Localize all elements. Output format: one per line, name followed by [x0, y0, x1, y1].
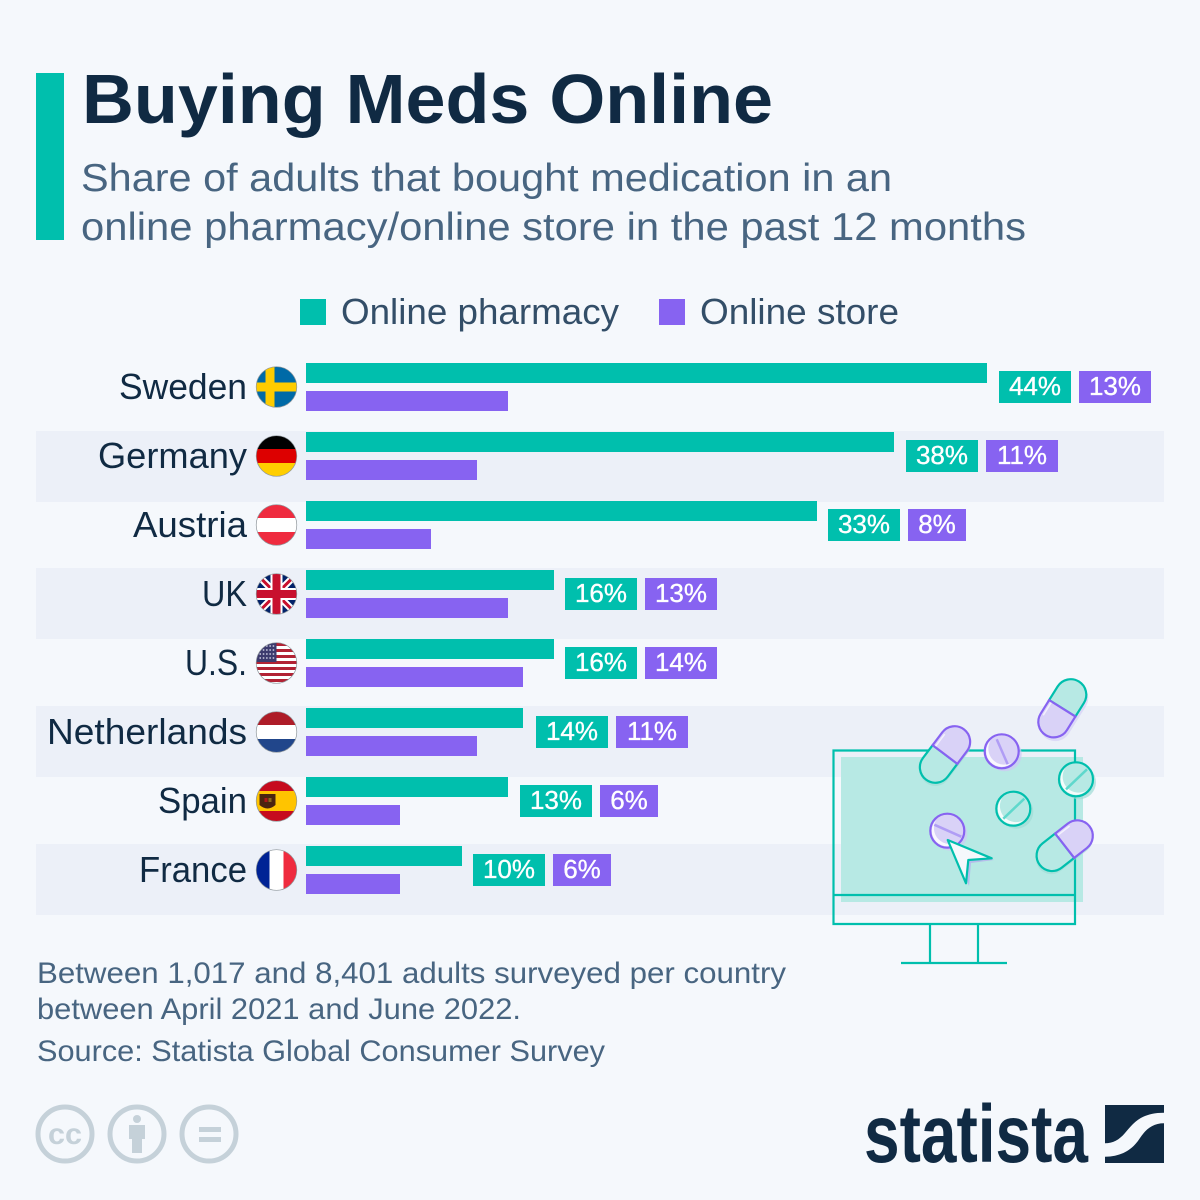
row: France: 10%: [483, 854, 535, 884]
cursor arrow: [948, 840, 994, 886]
row: Spain: 6%: [610, 785, 648, 815]
subtitle: Share of adults that bought medication in an: [81, 157, 892, 200]
row: Sweden: 44%: [1009, 371, 1061, 401]
icon: cc licence: cc: [48, 1118, 82, 1151]
illustration: monitor with pills: [834, 673, 1100, 963]
row: Spain: 13%: [530, 785, 582, 815]
footnote: between April 2021 and June 2022.: [37, 993, 521, 1026]
capsule right: [1028, 814, 1100, 880]
row: France: France: [139, 849, 247, 890]
row: Germany: Germany: [98, 435, 247, 476]
capsule top right: [1031, 673, 1095, 747]
footnote: Between 1,017 and 8,401 adults surveyed per country: [37, 957, 786, 990]
row: U.S.: U.S.: [185, 642, 247, 683]
row: France: [139, 846, 611, 894]
subtitle: [81, 157, 1026, 249]
row: U.S.: [185, 639, 717, 687]
row: Germany: 38%: [916, 440, 968, 470]
row: UK: UK: [202, 573, 247, 614]
row: Spain: Spain: [158, 780, 247, 821]
row: UK: [202, 570, 717, 618]
row: U.S.: 16%: [575, 647, 627, 677]
row: Austria: 33%: [838, 509, 890, 539]
tablet purple top: [985, 734, 1022, 771]
row: Germany: [98, 432, 1058, 480]
row: Netherlands: Netherlands: [47, 711, 247, 752]
tablet teal right: [1059, 762, 1096, 799]
legend: Online store: [700, 291, 899, 332]
row: Sweden: Sweden: [119, 366, 247, 407]
row: Germany: 11%: [997, 440, 1047, 470]
row: UK: 13%: [655, 578, 707, 608]
row: Sweden: [119, 363, 1151, 411]
row: Austria: Austria: [133, 504, 248, 545]
tablet purple centre: [930, 814, 967, 851]
row: Netherlands: 14%: [546, 716, 598, 746]
footnote: [37, 957, 786, 1068]
row: France: 6%: [563, 854, 601, 884]
legend: Online pharmacy: [341, 291, 619, 332]
row: U.S.: 14%: [655, 647, 707, 677]
legend: [300, 291, 899, 332]
subtitle: online pharmacy/online store in the past 12 months: [81, 206, 1026, 249]
tablet teal centre: [996, 792, 1033, 829]
icon: cc licence: [38, 1107, 236, 1161]
row: Netherlands: 11%: [627, 716, 677, 746]
row bands: [36, 431, 1164, 915]
row: Netherlands: [47, 708, 688, 756]
accent bar: [36, 73, 64, 240]
row: Spain: [158, 777, 658, 825]
title: Buying Meds Online: [82, 60, 773, 138]
row: UK: 16%: [575, 578, 627, 608]
row: Austria: 8%: [918, 509, 956, 539]
monitor outline: [834, 750, 1075, 963]
capsule on monitor edge: [912, 720, 978, 792]
statista logo: statista: [864, 1089, 1089, 1180]
row: Sweden: 13%: [1089, 371, 1141, 401]
icon: statista mark: [1105, 1105, 1164, 1163]
monitor screen fill: [841, 757, 1083, 902]
row: Austria: [133, 501, 966, 549]
footnote: Source: Statista Global Consumer Survey: [37, 1035, 605, 1068]
